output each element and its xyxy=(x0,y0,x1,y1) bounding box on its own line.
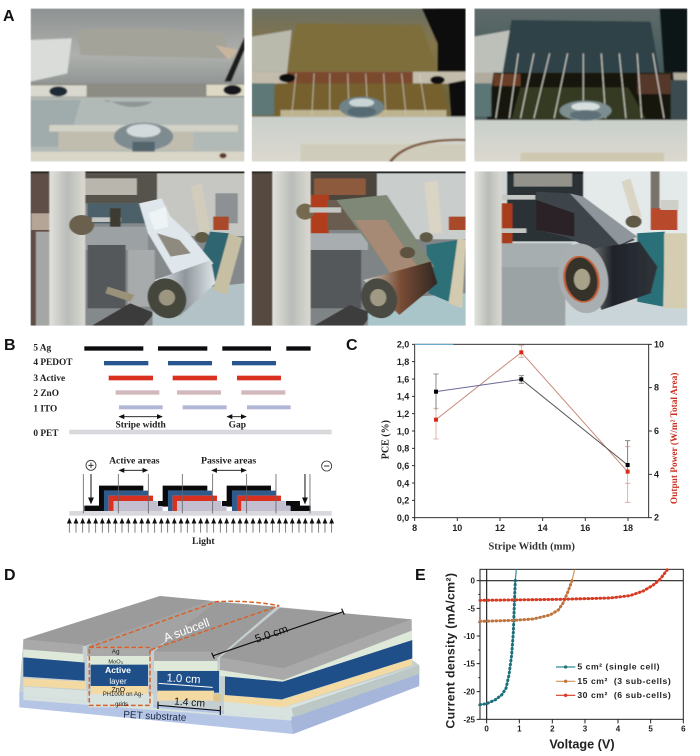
x axis tick labels: 1 xyxy=(517,725,522,734)
stripe width dimension: Stripe width xyxy=(115,420,167,430)
light label: Light xyxy=(192,536,215,547)
middle block xyxy=(154,602,277,701)
x axis tick labels: 16 xyxy=(580,523,590,533)
right axis tick labels: 8 xyxy=(654,383,659,393)
PET base xyxy=(69,511,332,516)
left axis title: PCE (%) xyxy=(381,420,392,459)
subcell block xyxy=(87,597,217,707)
assembled cross-section diagram xyxy=(69,455,332,547)
x axis title: Stripe Width (mm) xyxy=(488,541,575,552)
x axis tick labels: 3 xyxy=(583,725,588,734)
right block layers side xyxy=(220,608,419,717)
photo: slot die top 1 xyxy=(31,8,245,162)
left block xyxy=(23,596,210,702)
subcell dashed outline xyxy=(89,601,279,705)
layer labels: 2 ZnO xyxy=(33,389,59,399)
1.4 cm dimension xyxy=(158,697,220,715)
legend xyxy=(556,662,671,700)
subcell layer labels: MoO₃ xyxy=(108,659,123,665)
curve: 30 cm2 six sub-cells xyxy=(480,569,668,600)
x axis tick labels: 10 xyxy=(452,523,462,533)
1.4 cm dimension: 1.4 cm xyxy=(174,697,205,710)
legend entry: 5 cm2: 5 cm² (single cell) xyxy=(577,662,660,672)
panel A: photographs of the printing process xyxy=(31,8,687,326)
left axis tick labels: 0,0 xyxy=(397,513,409,523)
left axis tick labels: 0,4 xyxy=(397,478,409,488)
x axis tick labels: 12 xyxy=(495,523,505,533)
left axis tick labels: 2,0 xyxy=(397,340,409,350)
y axis tick labels: -5 xyxy=(468,604,476,613)
layer 2 ZnO bars xyxy=(116,390,285,395)
right axis tick labels: 10 xyxy=(654,339,664,349)
panel label C: C xyxy=(346,337,358,354)
left axis tick labels: 0,2 xyxy=(397,496,409,506)
gap dimension xyxy=(227,417,246,430)
subcell layer labels: PH1000 on Ag- xyxy=(103,692,143,698)
legend entry: 30 cm2: 30 cm² (6 sub-cells) xyxy=(577,690,671,700)
photo: slot die top 3 xyxy=(474,8,687,162)
x axis tick labels: 6 xyxy=(681,725,686,734)
left axis tick labels: 0,6 xyxy=(397,461,409,471)
panel D: 3D module layer schematic xyxy=(19,596,419,734)
photo: roll-to-roll machine 2 xyxy=(252,171,466,326)
minus terminal xyxy=(322,461,332,471)
photo: roll-to-roll machine 3 xyxy=(474,171,687,326)
plus terminal xyxy=(86,460,96,470)
layer 0 PET bar xyxy=(69,430,332,434)
x axis tick labels xyxy=(412,523,633,533)
layer labels: 1 ITO xyxy=(33,404,57,414)
gap dimension: Gap xyxy=(229,420,246,430)
legend entry: 15 cm2: 15 cm² (3 sub-cells) xyxy=(577,676,671,686)
subcell layer labels: ZnO xyxy=(112,687,126,694)
x axis tick labels: 4 xyxy=(616,725,621,734)
right axis title: Output Power (W/m² Total Area) xyxy=(669,373,680,504)
right axis tick labels: 6 xyxy=(654,426,659,436)
x axis tick labels: 2 xyxy=(550,725,555,734)
y axis title: Current density (mA/cm²) xyxy=(443,573,457,729)
exploded layers diagram xyxy=(33,344,332,439)
y axis tick labels xyxy=(463,577,476,724)
x axis tick labels: 0 xyxy=(484,725,489,734)
y axis tick labels: -20 xyxy=(463,688,476,697)
light arrows xyxy=(69,519,332,533)
subcell layer labels xyxy=(103,649,143,708)
output power series xyxy=(433,346,630,502)
area boundary lines xyxy=(83,474,310,513)
plot frame xyxy=(412,344,652,521)
panel label B: B xyxy=(4,337,16,354)
y axis tick labels: 0 xyxy=(471,577,476,586)
plot frame xyxy=(477,569,683,723)
x axis tick labels: 18 xyxy=(623,523,633,533)
photo: roll-to-roll machine 1 xyxy=(31,171,245,326)
layer labels: 4 PEDOT xyxy=(33,358,73,368)
left axis tick labels: 1,4 xyxy=(397,392,409,402)
passive areas label: Passive areas xyxy=(201,455,256,466)
layer 3 active bars xyxy=(109,376,281,380)
5.0 cm dimension: 5.0 cm xyxy=(254,623,290,646)
subcell layer labels: Ag xyxy=(112,649,120,656)
5.0 cm dimension xyxy=(212,609,344,659)
right axis tick labels: 4 xyxy=(654,469,659,479)
y axis tick labels: -15 xyxy=(463,660,476,669)
PET substrate xyxy=(19,665,419,734)
right axis tick labels: 2 xyxy=(654,513,659,523)
backing surface between stripes xyxy=(19,596,419,717)
left axis tick labels: 1,0 xyxy=(397,426,409,436)
layer 1 ITO bars xyxy=(119,405,291,409)
left axis tick labels: 1,6 xyxy=(397,374,409,384)
curve: 15 cm2 three sub-cells xyxy=(480,569,575,621)
current arrows xyxy=(91,474,305,503)
panel label A: A xyxy=(3,8,15,25)
layer 4 PEDOT bars xyxy=(104,361,276,365)
PET substrate label: PET substrate xyxy=(123,710,187,724)
1.0 cm dimension xyxy=(159,672,213,687)
y axis tick labels: -25 xyxy=(463,715,476,724)
panel label D: D xyxy=(4,567,16,584)
layer labels xyxy=(33,344,73,439)
x axis tick labels: 14 xyxy=(538,523,548,533)
active areas label: Active areas xyxy=(109,455,160,466)
x axis tick labels: 8 xyxy=(412,523,417,533)
subcell layer labels: grids xyxy=(115,702,128,708)
left axis tick labels: 1,2 xyxy=(397,409,409,419)
layer labels: 5 Ag xyxy=(33,344,52,354)
x axis tick labels xyxy=(484,725,686,734)
layer 5 Ag bars xyxy=(84,346,311,351)
module stack cells xyxy=(84,486,311,511)
A subcell label: A subcell xyxy=(162,615,211,645)
bottom electrode front band xyxy=(23,696,292,721)
PCE series xyxy=(433,374,630,470)
photo: slot die top 2 xyxy=(252,8,466,162)
layer labels: 3 Active xyxy=(33,374,65,384)
x axis title: Voltage (V) xyxy=(549,737,615,751)
x axis tick labels: 5 xyxy=(648,725,653,734)
layer labels: 0 PET xyxy=(33,429,59,439)
right axis tick labels xyxy=(654,339,664,523)
subcell layer labels: Active xyxy=(105,665,131,675)
y axis tick labels: -10 xyxy=(463,632,476,641)
panel label E: E xyxy=(415,567,426,584)
panel E: J-V curves chart xyxy=(443,569,686,751)
subcell layer labels: layer xyxy=(109,677,127,686)
panel C: PCE and output power chart xyxy=(381,339,680,552)
left axis tick labels xyxy=(397,340,409,523)
panel B: layer stack and cross-section schematic xyxy=(33,344,332,547)
left axis tick labels: 0,8 xyxy=(397,444,409,454)
1.0 cm dimension: 1.0 cm xyxy=(166,672,201,686)
curve: 5 cm2 single cell xyxy=(480,569,516,705)
left axis tick labels: 1,8 xyxy=(397,357,409,367)
